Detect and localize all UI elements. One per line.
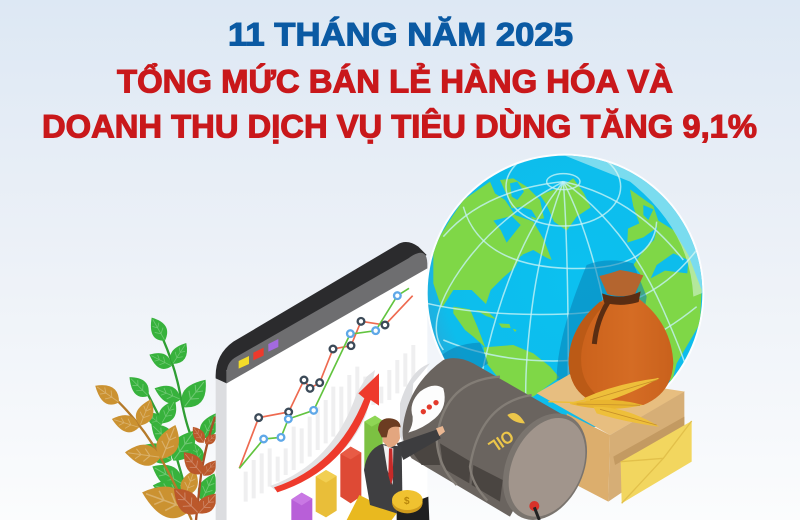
hair: [378, 418, 401, 437]
icon: oil barrel: [400, 358, 603, 520]
window title bar edge: [216, 242, 427, 383]
chart background bars: [246, 345, 413, 502]
window title bar: [227, 253, 427, 383]
bag neck tie: [602, 291, 641, 305]
pedestal: [397, 497, 429, 520]
gold bar: [347, 495, 397, 520]
title line 1: period: 11 THÁNG NĂM 2025: [228, 16, 573, 52]
suit: [364, 444, 402, 513]
arm: [397, 429, 441, 460]
3D bar: yellow: [316, 470, 337, 517]
3D bar: green: [364, 416, 383, 470]
barrel shadow: [400, 363, 430, 450]
3D bar: purple: [291, 493, 312, 520]
3D bar: red: [340, 447, 361, 503]
bag body: [569, 298, 673, 405]
icon: envelope: [621, 421, 692, 503]
box right face: [608, 392, 684, 502]
barrel ribs: [437, 377, 532, 501]
oil drop: [507, 413, 525, 423]
icon: money bag: [569, 270, 673, 405]
barrel valve: [529, 501, 539, 511]
window page: [227, 267, 427, 520]
ocean: [428, 156, 702, 430]
graticule: [428, 162, 697, 394]
continents: [433, 178, 702, 397]
inland seas: [493, 182, 688, 278]
box left face: [567, 413, 610, 502]
title: [42, 16, 757, 144]
title line 2: TỔNG MỨC BÁN LẺ HÀNG HÓA VÀ: [117, 64, 673, 100]
globe halo: [426, 154, 704, 432]
window side: [216, 373, 227, 520]
panel: browser window chart: [216, 242, 427, 520]
barrel lid: [487, 400, 603, 520]
title line 3: DOANH THU DỊCH VỤ TIÊU DÙNG TĂNG 9,1%: [42, 108, 757, 144]
bag top frill: [599, 270, 643, 296]
window buttons: [239, 339, 278, 369]
box top: [537, 374, 685, 435]
coin: [392, 492, 423, 513]
icon: box: [537, 374, 685, 502]
hand: [436, 426, 445, 436]
face: [383, 426, 400, 447]
icon: globe: [426, 147, 704, 432]
icon: businessman with coin: [347, 418, 445, 520]
barrel dark bands: [408, 440, 503, 502]
shirt: [383, 445, 393, 485]
glass rim: [565, 156, 702, 297]
barrel label: OIL: [485, 426, 518, 457]
speech bubble: [408, 386, 445, 433]
barrel body: [403, 358, 563, 517]
tie: [388, 448, 393, 485]
rising arrow: [270, 370, 379, 492]
line chart: [239, 288, 413, 468]
icon: plant with green and autumn leaves: [90, 314, 224, 520]
icon: businessman with coin: $: [404, 496, 410, 507]
shadows on globe: [433, 260, 647, 383]
icon: wheat ears: [548, 378, 659, 427]
